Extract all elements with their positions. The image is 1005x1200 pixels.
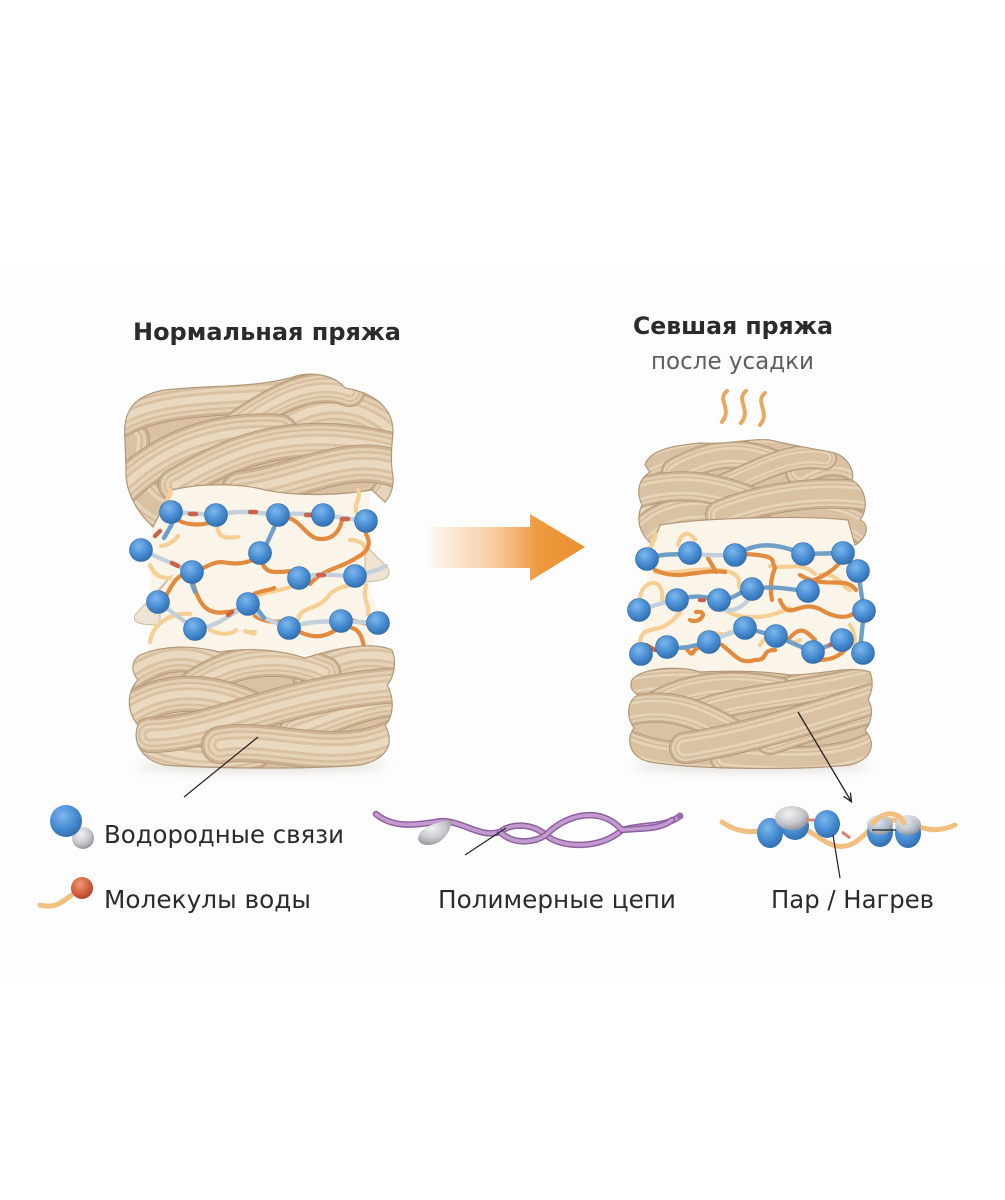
top braid <box>120 374 400 527</box>
leader line: normal yarn <box>184 737 258 797</box>
heading: normal yarn: Нормальная пряжа <box>133 318 401 346</box>
arrow: normal to shrunken <box>425 514 585 581</box>
yarn ground shadow <box>634 760 870 772</box>
left flap <box>134 575 172 625</box>
icon: polymer chains <box>376 812 684 845</box>
exposed fibre core <box>640 511 862 682</box>
bonding nodes <box>628 542 876 666</box>
bottom braid <box>625 668 875 768</box>
yarn ground shadow <box>137 760 387 772</box>
icon: water molecules <box>40 877 93 906</box>
label: polymer chains: Полимерные цепи <box>438 885 676 914</box>
panel: shrunken yarn illustration <box>625 440 876 772</box>
subheading: after shrinkage: после усадки <box>651 347 814 375</box>
right flap <box>365 545 389 582</box>
bottom braid <box>125 646 400 768</box>
panel: central backdrop <box>0 262 1005 988</box>
icon: steam <box>722 391 765 425</box>
label: steam and heat: Пар / Нагрев <box>771 885 934 914</box>
top braid <box>632 440 872 548</box>
bonding nodes <box>130 500 390 640</box>
polymer chains <box>141 490 386 648</box>
icon: steam and heat molecules <box>722 806 955 848</box>
leader line: steam and heat <box>833 835 840 878</box>
polymer chains <box>639 534 864 661</box>
label: hydrogen bonds: Водородные связи <box>104 820 344 849</box>
heading: shrunken yarn: Севшая пряжа <box>633 312 833 340</box>
arrow: shrunken yarn leader <box>798 712 851 801</box>
panel: normal yarn illustration <box>120 374 400 772</box>
label: water molecules: Молекулы воды <box>104 885 311 914</box>
leader line: polymer chains <box>465 828 506 855</box>
icon: hydrogen bonds <box>50 805 94 849</box>
exposed fibre core <box>146 482 378 655</box>
